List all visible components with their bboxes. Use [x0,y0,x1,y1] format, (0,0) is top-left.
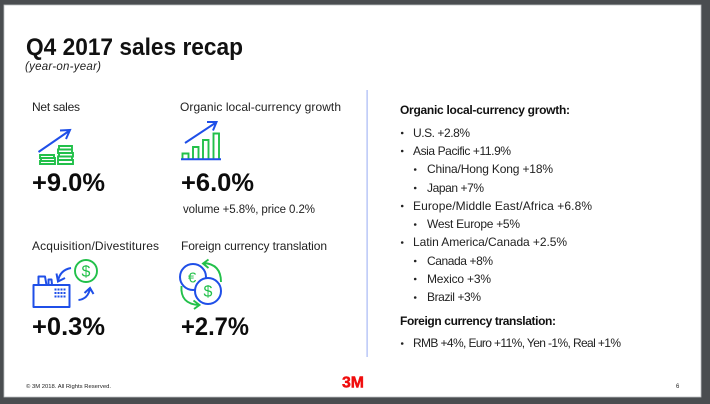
icon: currency exchange [180,260,221,309]
panel: regional breakdown [400,103,621,350]
panel: net sales [32,100,105,197]
regional list: Asia Pacific +11.9% [413,144,511,158]
panel: foreign currency [180,239,327,341]
panel: organic growth [180,100,341,216]
regional list: Europe/Middle East/Africa +6.8% [413,199,592,213]
page number: 6 [676,384,680,390]
regional list: Japan +7% [427,181,484,195]
organic growth label: Organic local-currency growth [180,100,341,114]
regional list: U.S. +2.8% [413,126,470,140]
panel: acquisition and divestitures [32,239,159,341]
regional list: West Europe +5% [427,217,520,231]
regional list: Brazil +3% [427,290,481,304]
net sales value: +9.0% [32,169,105,197]
organic growth value: +6.0% [181,169,254,197]
icon: currency exchange: € [188,270,197,286]
title: Q4 2017 sales recap [26,34,243,61]
vertical divider [366,90,368,357]
icon: currency exchange: $ [204,284,213,300]
icon: coins with rising arrow [38,130,73,164]
regional list: Mexico +3% [427,272,491,286]
currency heading: Foreign currency translation: [400,314,556,328]
currency list: RMB +4%, Euro +11%, Yen -1%, Real +1% [413,336,621,350]
foreign currency label: Foreign currency translation [181,239,327,253]
acquisition label: Acquisition/Divestitures [32,239,159,253]
volume and price note: volume +5.8%, price 0.2% [183,204,315,216]
copyright footer: © 3M 2018. All Rights Reserved. [26,383,112,390]
regional list: China/Hong Kong +18% [427,162,553,176]
icon: bar chart with rising arrow [181,122,221,159]
3M logo: 3M [342,374,364,392]
subtitle: (year-on-year) [25,61,101,73]
regional list [401,126,592,345]
acquisition value: +0.3% [32,313,105,341]
net sales label: Net sales [32,100,80,114]
breakdown heading: Organic local-currency growth: [400,103,570,117]
regional list: Canada +8% [427,254,493,268]
regional list: Latin America/Canada +2.5% [413,235,567,249]
foreign currency value: +2.7% [181,313,249,341]
icon: factory and dollar: $ [82,264,91,280]
